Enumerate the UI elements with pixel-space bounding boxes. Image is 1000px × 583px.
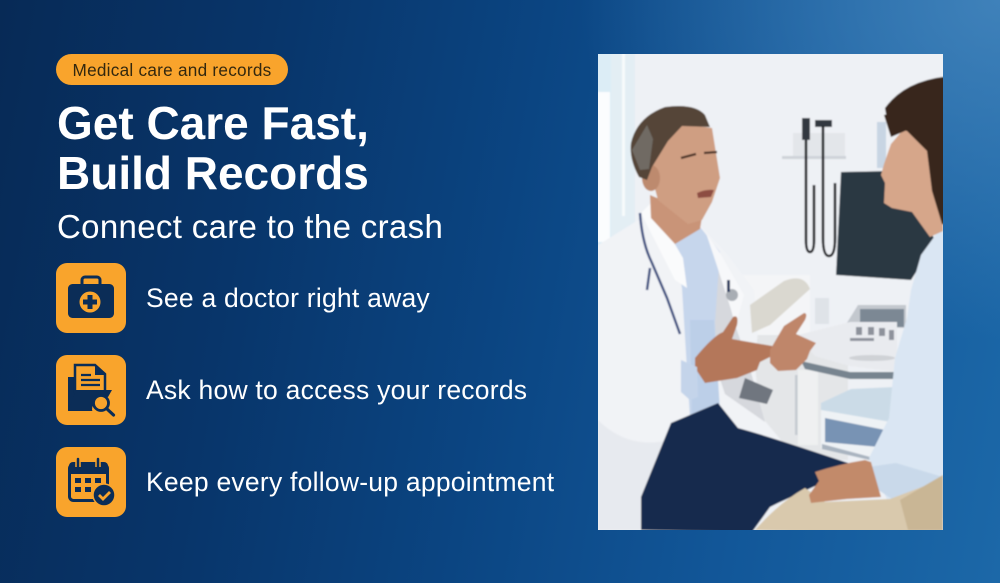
item text: see a doctor: See a doctor right away [146, 283, 430, 313]
photo: doctor talking with patient [598, 54, 943, 530]
title [57, 97, 369, 199]
exam table arm [750, 278, 810, 333]
stethoscope [640, 213, 680, 334]
coat lapel [641, 203, 687, 288]
title: Get Care Fast, [57, 97, 369, 149]
shirt [655, 208, 720, 418]
item text: access records: Ask how to access your records [146, 375, 527, 405]
category pill [56, 54, 288, 85]
subtitle: Connect care to the crash [57, 208, 443, 245]
category pill: Medical care and records [72, 60, 271, 80]
doctor neck and head [650, 195, 702, 244]
monitor [836, 171, 936, 280]
patient shirt [869, 228, 950, 518]
title: Build Records [57, 147, 369, 199]
patient face [881, 130, 943, 237]
patient hands [809, 460, 881, 503]
icon: calendar with check [56, 447, 126, 517]
patient trousers [755, 479, 943, 535]
doctor coat [590, 205, 785, 536]
otoscope [793, 133, 845, 156]
ultrasound [845, 305, 906, 328]
doctor hands [695, 316, 778, 383]
icon: folder with magnifier [56, 355, 126, 425]
trousers [641, 403, 852, 532]
icon: medical bag [56, 263, 126, 333]
item text: follow-up appointments: Keep every follow-up appointment [146, 467, 554, 497]
